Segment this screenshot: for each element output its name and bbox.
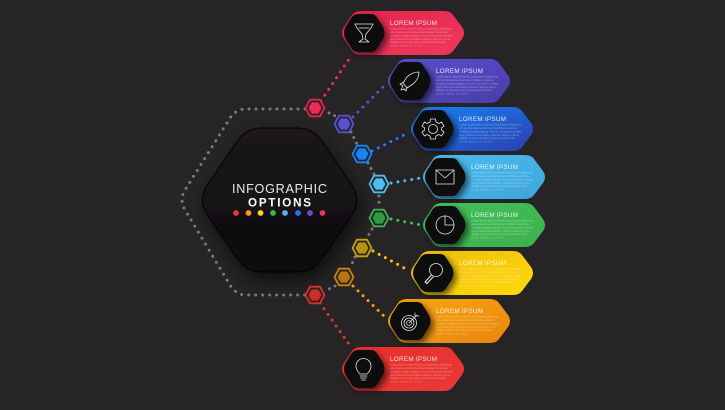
body text: Lorem ipsum dolor sit amet, consectetur adipiscing: [471, 219, 533, 223]
body text: aliquip ex ea commodo consequat duis aute: [436, 88, 492, 92]
node 2: [334, 116, 354, 132]
body text: [459, 123, 522, 144]
body text: quis nostrud exercitation ullamco laboris nisi ut: [436, 325, 496, 329]
body text: et dolore magna aliqua. Ut enim ad minim veniam: [436, 81, 499, 85]
body text: irure dolor in velit: [471, 188, 503, 192]
icon: trophy: [355, 24, 373, 42]
body text: et dolore magna aliqua. Ut enim ad minim veniam: [459, 273, 522, 277]
heading: LOREM IPSUM: [390, 356, 437, 363]
coloured dotted connectors to panels: [320, 56, 421, 347]
body text: irure dolor in velit: [390, 380, 422, 384]
panel 8: light bulb: [342, 347, 464, 391]
panel 1: trophy: [342, 11, 464, 55]
body text: irure dolor in velit: [390, 44, 422, 48]
body text: Lorem ipsum dolor sit amet, consectetur adipiscing: [459, 123, 521, 127]
colour dots: [233, 210, 325, 216]
body text: aliquip ex ea commodo consequat duis aute: [459, 280, 515, 284]
body text: Lorem ipsum dolor sit amet, consectetur adipiscing: [459, 267, 521, 271]
panel 3: gear: [411, 107, 533, 151]
heading: LOREM IPSUM: [471, 164, 518, 171]
body text: irure dolor in velit: [436, 332, 468, 336]
body text: et dolore magna aliqua. Ut enim ad minim veniam: [459, 129, 522, 133]
body text: et dolore magna aliqua. Ut enim ad minim veniam: [390, 33, 453, 37]
icon: gear: [422, 119, 444, 139]
heading: LOREM IPSUM: [471, 212, 518, 219]
icon: envelope: [436, 170, 454, 184]
body text: irure dolor in velit: [471, 236, 503, 240]
node 4: [370, 176, 388, 192]
body text: quis nostrud exercitation ullamco laboris nisi ut: [390, 37, 450, 41]
panel 5: pie chart: [423, 203, 545, 247]
grey dotted connectors between nodes: [329, 113, 379, 289]
node 5: [370, 210, 388, 226]
heading: LOREM IPSUM: [390, 20, 437, 27]
body text: elit, sed do eiusmod tempor incididunt ut labore: [390, 366, 448, 370]
node 8: [306, 287, 324, 303]
body text: quis nostrud exercitation ullamco laboris nisi ut: [390, 373, 450, 377]
central hexagon: [202, 128, 356, 272]
heading: LOREM IPSUM: [459, 116, 506, 123]
body text: quis nostrud exercitation ullamco laboris nisi ut: [459, 277, 519, 281]
body text: elit, sed do eiusmod tempor incididunt ut labore: [436, 318, 494, 322]
body text: elit, sed do eiusmod tempor incididunt ut labore: [436, 78, 494, 82]
body text: aliquip ex ea commodo consequat duis aute: [471, 232, 527, 236]
body text: [390, 363, 453, 384]
node 1: [306, 100, 324, 116]
body text: [471, 171, 534, 192]
body text: Lorem ipsum dolor sit amet, consectetur adipiscing: [471, 171, 533, 175]
panel 4: envelope: [423, 155, 545, 199]
body text: irure dolor in velit: [436, 92, 468, 96]
body text: aliquip ex ea commodo consequat duis aute: [390, 376, 446, 380]
body text: Lorem ipsum dolor sit amet, consectetur adipiscing: [436, 315, 498, 319]
body text: elit, sed do eiusmod tempor incididunt ut labore: [459, 126, 517, 130]
title: infographic: INFOGRAPHIC: [232, 182, 327, 196]
heading: LOREM IPSUM: [436, 68, 483, 75]
body text: elit, sed do eiusmod tempor incididunt ut labore: [471, 174, 529, 178]
heading: LOREM IPSUM: [436, 308, 483, 315]
body text: quis nostrud exercitation ullamco laboris nisi ut: [459, 133, 519, 137]
body text: elit, sed do eiusmod tempor incididunt ut labore: [390, 30, 448, 34]
heading: LOREM IPSUM: [459, 260, 506, 267]
body text: elit, sed do eiusmod tempor incididunt ut labore: [471, 222, 529, 226]
node 7: [334, 269, 354, 285]
body text: [436, 75, 499, 96]
body text: irure dolor in velit: [459, 140, 491, 144]
body text: aliquip ex ea commodo consequat duis aute: [436, 328, 492, 332]
body text: Lorem ipsum dolor sit amet, consectetur adipiscing: [390, 27, 452, 31]
body text: aliquip ex ea commodo consequat duis aute: [471, 184, 527, 188]
icon: pie chart: [436, 216, 454, 234]
body text: quis nostrud exercitation ullamco laboris nisi ut: [436, 85, 496, 89]
icon: rocket: [400, 72, 419, 91]
panel 7: target: [388, 299, 510, 343]
panel 2: rocket: [388, 59, 510, 103]
body text: quis nostrud exercitation ullamco laboris nisi ut: [471, 181, 531, 185]
body text: [390, 27, 453, 48]
body text: et dolore magna aliqua. Ut enim ad minim veniam: [390, 369, 453, 373]
body text: irure dolor in velit: [459, 284, 491, 288]
body text: [459, 267, 522, 288]
icon: magnifier: [425, 264, 442, 284]
body text: Lorem ipsum dolor sit amet, consectetur adipiscing: [390, 363, 452, 367]
icon: light bulb: [356, 358, 371, 380]
body text: quis nostrud exercitation ullamco laboris nisi ut: [471, 229, 531, 233]
body text: [471, 219, 534, 240]
body text: aliquip ex ea commodo consequat duis aute: [459, 136, 515, 140]
body text: Lorem ipsum dolor sit amet, consectetur adipiscing: [436, 75, 498, 79]
body text: elit, sed do eiusmod tempor incididunt ut labore: [459, 270, 517, 274]
body text: et dolore magna aliqua. Ut enim ad minim veniam: [436, 321, 499, 325]
icon: target: [402, 313, 419, 330]
dotted outer hexagon: [182, 109, 305, 295]
body text: et dolore magna aliqua. Ut enim ad minim veniam: [471, 177, 534, 181]
body text: [436, 315, 499, 336]
node 3: [352, 146, 372, 162]
node 6: [352, 240, 372, 256]
body text: aliquip ex ea commodo consequat duis aute: [390, 40, 446, 44]
body text: et dolore magna aliqua. Ut enim ad minim veniam: [471, 225, 534, 229]
title: options: OPTIONS: [248, 196, 311, 210]
panel 6: magnifier: [411, 251, 533, 295]
